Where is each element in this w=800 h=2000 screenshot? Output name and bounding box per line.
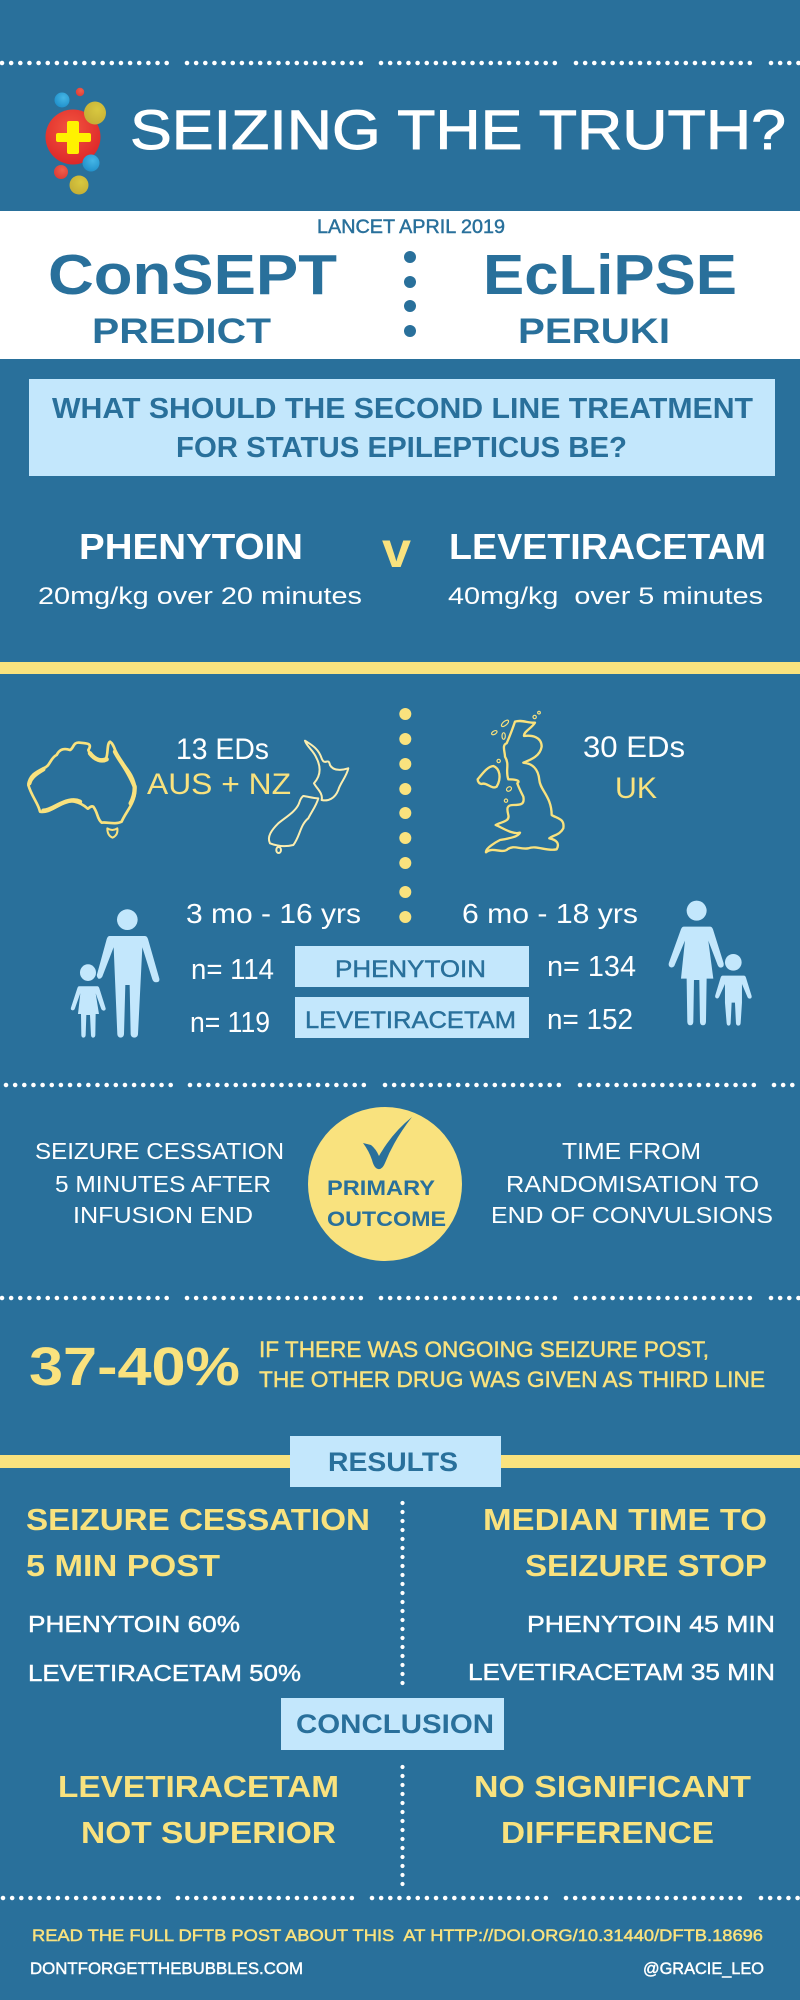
outcome: ConSEPT [35, 1138, 284, 1228]
region: AUS + NZ: AUS + NZ [147, 768, 291, 801]
icon: adult and child right [669, 901, 752, 1026]
region: UK: UK [615, 772, 657, 805]
outcome: ConSEPT: 5 MINUTES AFTER [55, 1171, 271, 1197]
heading: results [290, 1436, 501, 1487]
label box: levetiracetam [295, 997, 529, 1038]
panel: trial populations [28, 708, 752, 1039]
badge: primary outcome: OUTCOME [327, 1208, 446, 1231]
conclusion left: LEVETIRACETAM [58, 1769, 339, 1804]
drug: phenytoin: PHENYTOIN [79, 526, 303, 567]
icon: checkmark [363, 1117, 412, 1169]
result: phenytoin 60%: PHENYTOIN 60% [28, 1611, 240, 1637]
panel: results [26, 1502, 775, 1686]
stat caption: THE OTHER DRUG WAS GIVEN AS THIRD LINE [259, 1367, 765, 1392]
result: levetiracetam 50%: LEVETIRACETAM 50% [28, 1660, 301, 1686]
label box: phenytoin [295, 946, 529, 987]
drug: levetiracetam: LEVETIRACETAM [449, 526, 766, 567]
outcome: EcLiPSE: RANDOMISATION TO [506, 1171, 759, 1197]
conclusion left [58, 1769, 339, 1850]
question line 2: FOR STATUS EPILEPTICUS BE? [176, 432, 627, 464]
conclusion left: NOT SUPERIOR [81, 1815, 336, 1850]
footer [30, 1927, 764, 1978]
result heading: cessation: 5 MIN POST [26, 1548, 220, 1583]
dose: levetiracetam: 40mg/kg over 5 minutes [448, 583, 763, 610]
big stat: 37-40% [29, 1337, 240, 1397]
question line 1: WHAT SHOULD THE SECOND LINE TREATMENT [52, 393, 753, 425]
outcome: EcLiPSE: END OF CONVULSIONS [491, 1202, 773, 1228]
icon: adult and child left [71, 909, 159, 1038]
age range: ConSEPT: 3 mo - 16 yrs [186, 898, 361, 929]
handle: @GRACIE_LEO [643, 1959, 764, 1978]
panel: trial names [0, 211, 800, 359]
icon: bubbles logo with plus [46, 88, 106, 194]
result heading: median time: MEDIAN TIME TO [483, 1502, 767, 1537]
source link: READ THE FULL DFTB POST ABOUT THIS AT HTTP://DOI.ORG/10.31440/DFTB.18696 [32, 1927, 763, 1945]
trial: ConSEPT: ConSEPT [48, 243, 337, 307]
badge: primary outcome [308, 1107, 462, 1261]
heading: conclusion: CONCLUSION [296, 1709, 494, 1739]
dose: phenytoin: 20mg/kg over 20 minutes [38, 583, 362, 610]
journal date: LANCET APRIL 2019 [317, 217, 505, 238]
panel: research question [29, 379, 775, 476]
network: PREDICT: PREDICT [92, 312, 271, 351]
conclusion right [474, 1769, 751, 1850]
map: New Zealand [269, 741, 348, 853]
outcome: EcLiPSE: TIME FROM [562, 1138, 701, 1164]
stat caption [259, 1337, 765, 1392]
result: levetiracetam 35 min: LEVETIRACETAM 35 MIN [468, 1659, 775, 1685]
divider: yellow dots [399, 708, 411, 923]
label box: phenytoin: PHENYTOIN [335, 956, 486, 983]
map: Australia [28, 742, 135, 838]
outcome: ConSEPT: SEIZURE CESSATION [35, 1138, 284, 1164]
versus: v [382, 522, 411, 578]
map: UK [478, 711, 564, 852]
panel: conclusion [58, 1767, 751, 1885]
panel: primary outcome [35, 1107, 773, 1261]
stat caption: IF THERE WAS ONGOING SEIZURE POST, [259, 1337, 709, 1362]
age range: EcLiPSE: 6 mo - 18 yrs [462, 898, 638, 929]
website: DONTFORGETTHEBUBBLES.COM [30, 1959, 303, 1978]
result heading: cessation [26, 1502, 370, 1583]
centres: 13 EDs: 13 EDs [176, 733, 269, 766]
n levetiracetam EcLiPSE: n= 152 [547, 1004, 633, 1036]
n levetiracetam ConSEPT: n= 119 [190, 1007, 270, 1039]
heading: results: RESULTS [328, 1447, 458, 1477]
conclusion right: NO SIGNIFICANT [474, 1769, 751, 1804]
badge: primary outcome: PRIMARY [327, 1177, 435, 1200]
network: PERUKI: PERUKI [518, 312, 670, 351]
result heading: median time: SEIZURE STOP [525, 1548, 767, 1583]
result heading: median time [483, 1502, 767, 1583]
drug comparison [38, 522, 766, 610]
outcome: EcLiPSE [491, 1138, 773, 1228]
conclusion right: DIFFERENCE [501, 1815, 714, 1850]
outcome: ConSEPT: INFUSION END [73, 1202, 253, 1228]
title: SEIZING THE TRUTH? [130, 98, 786, 161]
centres: 30 EDs: 30 EDs [583, 731, 685, 764]
label box: levetiracetam: LEVETIRACETAM [305, 1007, 516, 1034]
result: phenytoin 45 min: PHENYTOIN 45 MIN [527, 1611, 775, 1637]
divider dots [404, 251, 416, 337]
result heading: cessation: SEIZURE CESSATION [26, 1502, 370, 1537]
n phenytoin EcLiPSE: n= 134 [547, 951, 636, 983]
callout: third line [29, 1337, 765, 1397]
n phenytoin ConSEPT: n= 114 [191, 954, 274, 986]
trial: EcLiPSE: EcLiPSE [483, 243, 737, 307]
heading: conclusion [281, 1698, 504, 1750]
